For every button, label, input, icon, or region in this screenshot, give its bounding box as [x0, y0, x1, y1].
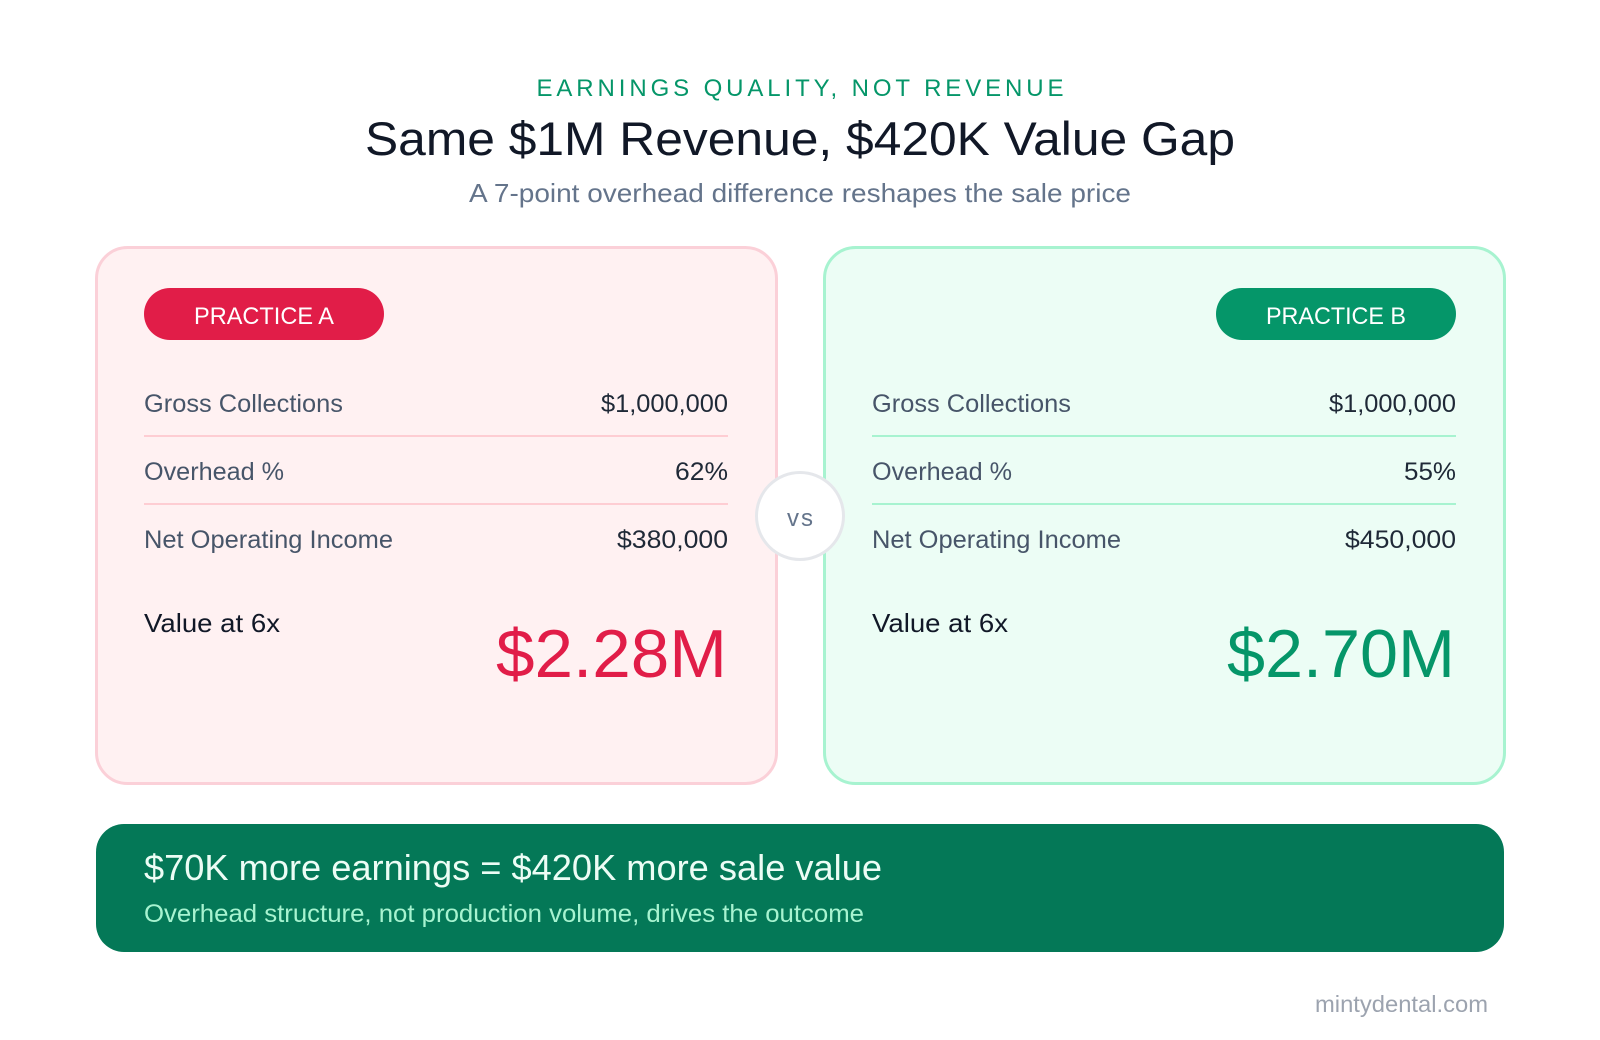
row: gross collections: Gross Collections: [144, 390, 343, 418]
row: net operating income: $380,000: [617, 526, 728, 554]
vs badge: [756, 472, 844, 560]
row: gross collections: [872, 390, 1456, 437]
value: practice A: $2.28M: [496, 616, 727, 692]
row: net operating income: $450,000: [1345, 526, 1456, 554]
row: gross collections: $1,000,000: [601, 390, 728, 418]
row: overhead: [872, 458, 1456, 505]
title: Same $1M Revenue, $420K Value Gap: [365, 112, 1235, 165]
row: gross collections: Gross Collections: [872, 390, 1071, 418]
banner headline: $70K more earnings = $420K more sale value: [144, 847, 882, 888]
panel: practice A: [96, 248, 776, 784]
value label: Value at 6x: [872, 608, 1008, 638]
value: practice B: $2.70M: [1227, 616, 1455, 692]
eyebrow heading: EARNINGS QUALITY, NOT REVENUE: [536, 75, 1064, 102]
vs badge: vs: [787, 505, 813, 532]
banner: takeaway: [96, 824, 1504, 952]
row: overhead: [144, 458, 728, 505]
row: net operating income: Net Operating Income: [144, 526, 393, 554]
badge: practice A: [144, 288, 384, 340]
panel: practice B: [824, 248, 1504, 784]
banner subtext: Overhead structure, not production volume, drives the outcome: [144, 900, 864, 928]
footer source: mintydental.com: [1315, 991, 1488, 1017]
subtitle: A 7-point overhead difference reshapes the sale price: [469, 178, 1131, 208]
row: overhead: Overhead %: [144, 458, 284, 486]
badge: practice B: PRACTICE B: [1266, 303, 1406, 330]
row: net operating income: [872, 526, 1456, 554]
row: overhead: Overhead %: [872, 458, 1012, 486]
row: net operating income: [144, 526, 728, 554]
badge: practice B: [1216, 288, 1456, 340]
row: gross collections: [144, 390, 728, 437]
row: gross collections: $1,000,000: [1329, 390, 1456, 418]
row: net operating income: Net Operating Income: [872, 526, 1121, 554]
row: overhead: 55%: [1404, 458, 1456, 486]
badge: practice A: PRACTICE A: [194, 303, 334, 330]
row: overhead: 62%: [675, 458, 728, 486]
value label: Value at 6x: [144, 608, 280, 638]
